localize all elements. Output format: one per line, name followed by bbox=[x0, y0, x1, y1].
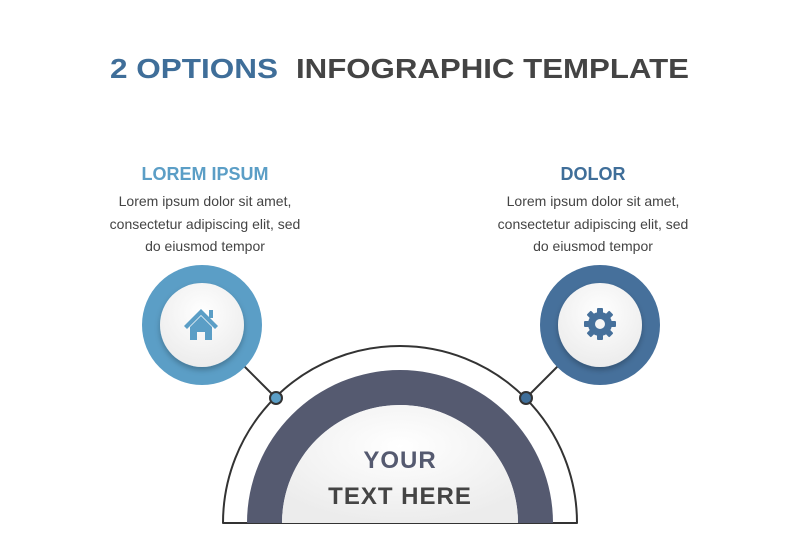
panel: right option text bbox=[498, 164, 688, 254]
right circle with gear icon bbox=[540, 265, 660, 385]
connector lines bbox=[243, 365, 559, 398]
center white half-circle with text: YOUR bbox=[363, 447, 437, 474]
center white half-circle with text bbox=[282, 405, 518, 523]
panel: left option text: Lorem ipsum dolor sit amet, bbox=[119, 193, 291, 209]
panel: left option text bbox=[110, 164, 300, 254]
panel: left option text: LOREM IPSUM bbox=[141, 164, 269, 184]
title bbox=[110, 53, 689, 84]
title: 2 OPTIONS bbox=[110, 53, 278, 84]
icon: home bbox=[184, 309, 218, 340]
center white half-circle with text: TEXT HERE bbox=[328, 483, 472, 510]
panel: right option text: DOLOR bbox=[560, 164, 626, 184]
icon: gear bbox=[584, 308, 616, 340]
panel: right option text: consectetur adipiscing elit, sed bbox=[498, 216, 688, 232]
left circle with home icon bbox=[142, 265, 262, 385]
title: INFOGRAPHIC TEMPLATE bbox=[296, 53, 689, 84]
panel: left option text: do eiusmod tempor bbox=[145, 238, 265, 254]
panel: right option text: do eiusmod tempor bbox=[533, 238, 653, 254]
outer arc outline bbox=[223, 346, 577, 523]
panel: left option text: consectetur adipiscing elit, sed bbox=[110, 216, 300, 232]
dark ring bbox=[247, 370, 553, 523]
connector dots bbox=[270, 392, 532, 404]
panel: right option text: Lorem ipsum dolor sit amet, bbox=[507, 193, 679, 209]
